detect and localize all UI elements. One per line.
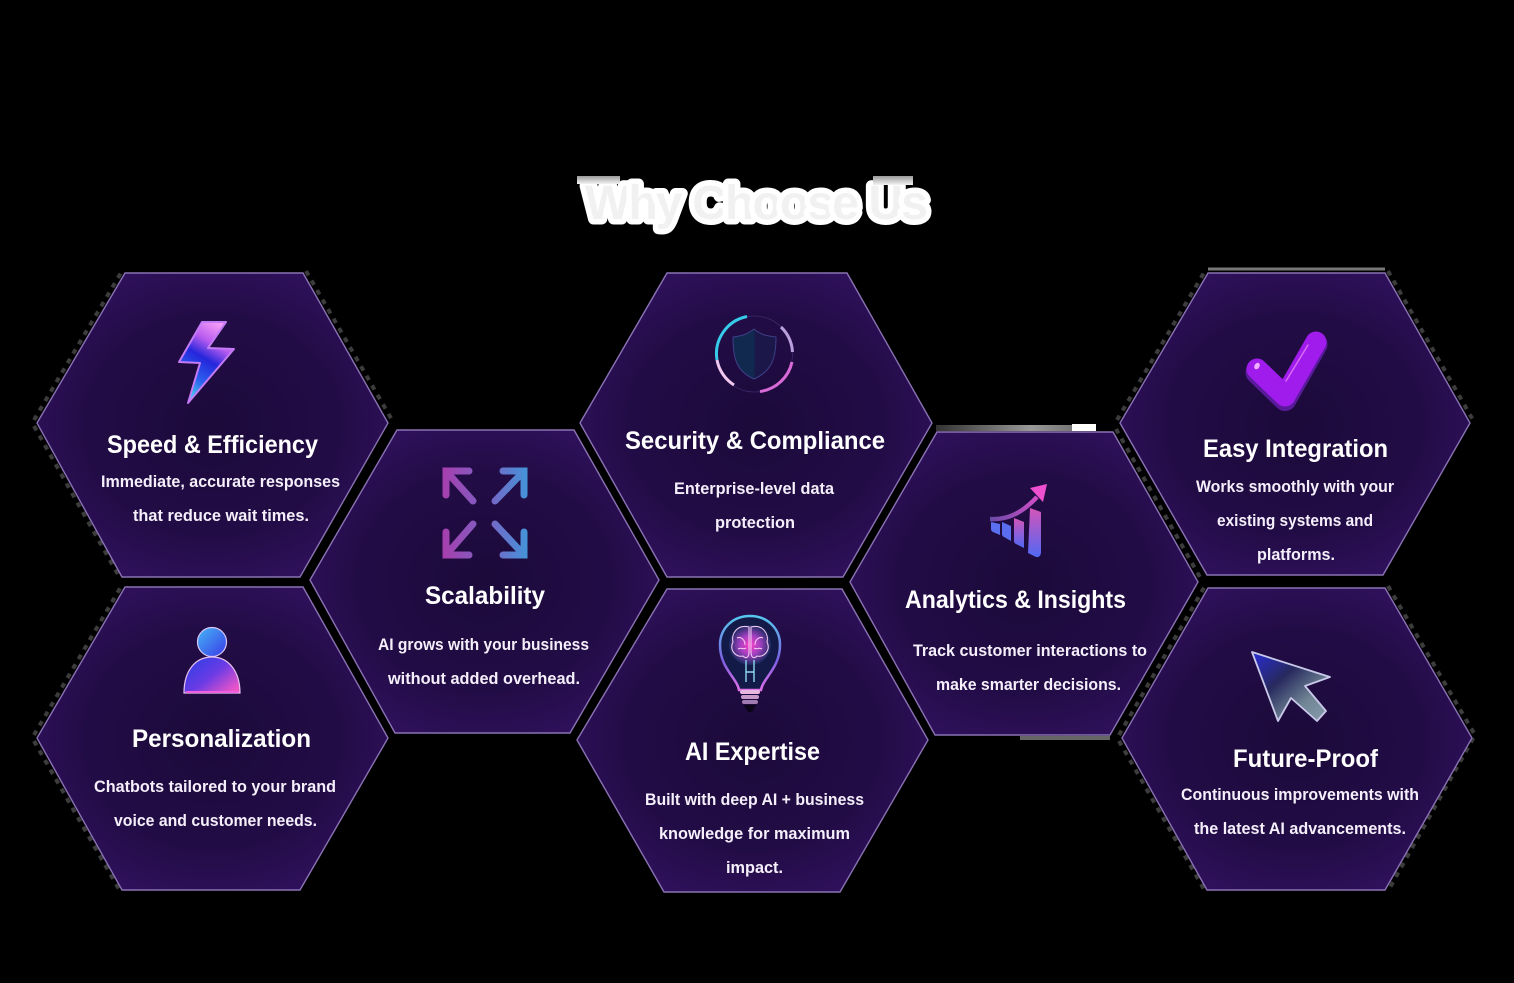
hexagon: Security & Compliance: [580, 273, 932, 577]
description: Easy Integration: [1196, 477, 1394, 564]
card: AI Expertise: [577, 589, 928, 892]
description: Future-Proof: [1181, 785, 1419, 838]
description: Scalability: AI grows with your business: [378, 635, 589, 654]
heading: Speed & Efficiency: Speed & Efficiency: [107, 431, 318, 459]
hexagon: Scalability: [310, 430, 659, 733]
description: Speed & Efficiency: Immediate, accurate responses: [101, 472, 340, 491]
card: Easy Integration: [1120, 273, 1470, 575]
heading: AI Expertise: AI Expertise: [685, 738, 820, 766]
heading: Personalization: Personalization: [132, 725, 311, 753]
hexagon: AI Expertise: [577, 589, 928, 892]
description: AI Expertise: [645, 790, 864, 877]
hexagon: Speed & Efficiency: [37, 273, 388, 577]
description: Scalability: without added overhead.: [387, 669, 580, 688]
hexagon: Easy Integration: [1120, 273, 1470, 575]
card: Future-Proof: [1122, 588, 1472, 890]
description: Security & Compliance: Enterprise-level data: [674, 479, 835, 498]
description: Scalability: [378, 635, 589, 688]
description: Personalization: Chatbots tailored to your brand: [94, 777, 336, 796]
title: Why Choose Us: [585, 177, 928, 230]
heading: Scalability: Scalability: [425, 582, 545, 610]
icon: four expanding arrows: [446, 471, 524, 555]
icon: check mark: [1253, 342, 1316, 400]
description: Personalization: voice and customer needs.: [114, 811, 317, 830]
description: Future-Proof: the latest AI advancements.: [1194, 819, 1406, 838]
description: Analytics & Insights: [913, 641, 1147, 694]
card: Personalization: [37, 587, 388, 890]
hexagon: Analytics & Insights: [850, 432, 1198, 735]
icon: lightning bolt: [179, 322, 234, 403]
icon: brain light bulb: [720, 616, 780, 712]
card: Speed & Efficiency: [37, 273, 388, 577]
description: Security & Compliance: [674, 479, 835, 532]
description: Speed & Efficiency: that reduce wait times.: [133, 506, 309, 525]
icon: shield in ring: [716, 316, 792, 392]
description: Future-Proof: Continuous improvements with: [1181, 785, 1419, 804]
description: Speed & Efficiency: [101, 472, 340, 525]
card: Scalability: [310, 430, 659, 733]
description: AI Expertise: knowledge for maximum: [659, 824, 850, 843]
hexagon: Personalization: [37, 587, 388, 890]
icon: rising bar chart: [990, 484, 1047, 557]
description: Easy Integration: Works smoothly with your: [1196, 477, 1394, 496]
description: AI Expertise: Built with deep AI + business: [645, 790, 864, 809]
icon: cursor arrow: [1252, 652, 1330, 721]
icon: person: [184, 628, 240, 693]
description: Analytics & Insights: Track customer interactions to: [913, 641, 1147, 660]
heading: Future-Proof: Future-Proof: [1233, 745, 1379, 773]
card: Analytics & Insights: [850, 432, 1198, 735]
description: Security & Compliance: protection: [715, 513, 795, 532]
description: AI Expertise: impact.: [726, 858, 783, 877]
heading: Easy Integration: Easy Integration: [1203, 435, 1388, 463]
heading: Security & Compliance: Security & Compliance: [625, 427, 885, 455]
hexagon: Future-Proof: [1122, 588, 1472, 890]
description: Analytics & Insights: make smarter decisions.: [936, 675, 1121, 694]
card: Security & Compliance: [580, 273, 932, 577]
description: Easy Integration: existing systems and: [1217, 511, 1373, 530]
description: Easy Integration: platforms.: [1257, 545, 1335, 564]
description: Personalization: [94, 777, 336, 830]
heading: Analytics & Insights: Analytics & Insights: [905, 586, 1126, 614]
